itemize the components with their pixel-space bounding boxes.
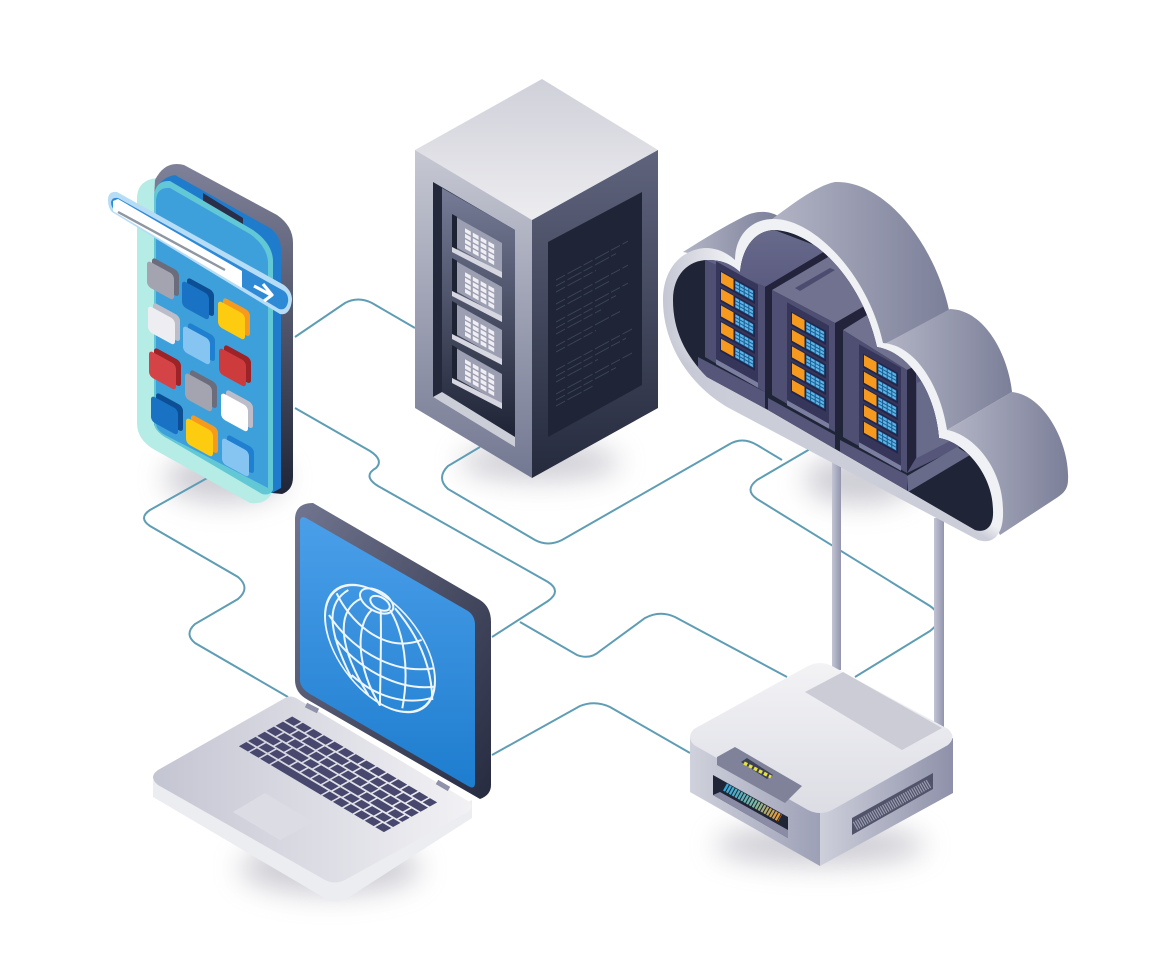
icon: white app 2 xyxy=(221,386,253,436)
server bottom ledge xyxy=(433,392,515,447)
cloud with servers xyxy=(663,182,1068,541)
router left face xyxy=(690,737,820,866)
cloud dark interior xyxy=(673,230,993,531)
icon: yellow app 2 xyxy=(186,411,218,461)
phone bezel xyxy=(154,175,281,493)
router xyxy=(690,663,953,866)
icon: light blue app 2 xyxy=(222,431,254,481)
icon: gray app xyxy=(147,254,179,304)
server rack xyxy=(415,79,658,478)
server drive slot 4 xyxy=(452,345,502,411)
phone teal glass band xyxy=(154,181,273,494)
cloud server A xyxy=(698,215,827,412)
router left vent with LEDs xyxy=(713,775,788,838)
address bar xyxy=(108,192,292,314)
server top face xyxy=(415,79,658,220)
router top face xyxy=(690,663,952,813)
server right face xyxy=(532,150,658,478)
icon: gray app 2 xyxy=(185,366,217,416)
icon: yellow app xyxy=(218,294,250,344)
servers inside cloud xyxy=(698,215,970,492)
connection lines xyxy=(144,300,938,755)
server left opening xyxy=(433,182,515,447)
laptop keyboard xyxy=(243,719,434,830)
icon: light blue app xyxy=(183,319,215,369)
server left face xyxy=(415,150,532,478)
laptop xyxy=(153,503,491,902)
server drive slot 2 xyxy=(452,258,502,324)
icon: arrow xyxy=(254,284,272,301)
server inner panel xyxy=(442,188,515,437)
icon: blue app 2 xyxy=(151,389,183,439)
ground shadows xyxy=(165,444,925,894)
app icons xyxy=(147,254,254,481)
antenna poles xyxy=(832,458,944,733)
icon: white app xyxy=(148,299,180,349)
cloud rim left shading xyxy=(663,248,735,420)
laptop base xyxy=(153,696,472,882)
isometric network scene xyxy=(108,79,1068,907)
icon: red app 2 xyxy=(149,344,181,394)
globe icon xyxy=(325,562,435,735)
phone screen xyxy=(156,188,268,488)
laptop hinges xyxy=(306,705,449,789)
laptop screen xyxy=(300,517,475,787)
server drive slot 3 xyxy=(452,301,502,367)
cloud back lobes xyxy=(683,182,1068,535)
laptop trackpad xyxy=(233,793,313,840)
phone notch xyxy=(203,193,243,228)
cloud server B xyxy=(768,257,871,449)
server drive slot 1 xyxy=(452,214,502,280)
router status panel xyxy=(717,747,802,803)
cloud white rim xyxy=(663,219,1003,541)
icon: red app xyxy=(219,341,251,391)
router top plate xyxy=(805,672,942,750)
smartphone xyxy=(108,164,293,503)
router right vent xyxy=(852,773,933,835)
router right face xyxy=(820,738,953,866)
server right code panel xyxy=(548,192,642,437)
phone body xyxy=(154,164,293,494)
phone glass backing xyxy=(137,178,273,503)
laptop lower body xyxy=(153,780,472,902)
cloud server C xyxy=(840,315,970,492)
laptop lid xyxy=(295,503,491,799)
icon: blue app xyxy=(182,274,214,324)
